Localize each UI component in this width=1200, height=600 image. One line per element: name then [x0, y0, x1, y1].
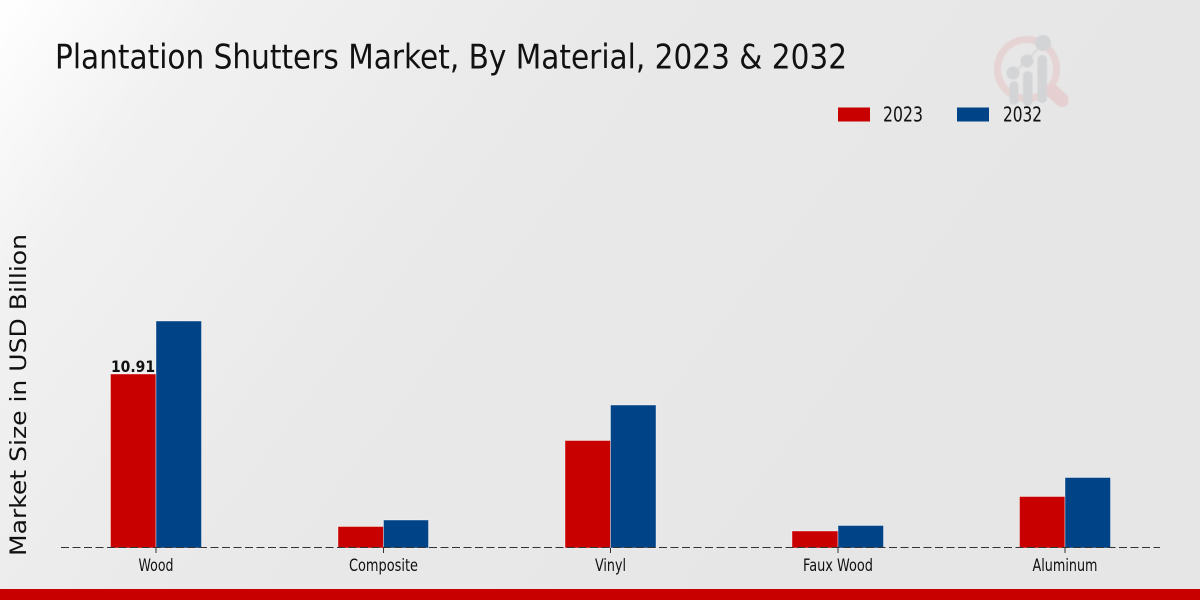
bar chart	[61, 321, 1160, 575]
bars: Vinyl	[565, 405, 656, 548]
category label: Composite: Composite	[349, 556, 418, 575]
data label: Wood 2023: 10.91	[111, 357, 155, 376]
bars: Wood	[110, 321, 202, 548]
footer bar	[0, 589, 1200, 600]
legend item: 2032	[957, 102, 1042, 126]
category label: Aluminum: Aluminum	[1032, 556, 1098, 575]
legend item: 2023: 2023	[883, 102, 923, 126]
bars: Aluminum	[1020, 478, 1110, 548]
category label: Vinyl: Vinyl	[595, 556, 626, 575]
category label: Faux Wood: Faux Wood	[803, 556, 873, 575]
legend item: 2032: 2032	[1003, 102, 1042, 126]
y-axis title: Market Size in USD Billion	[6, 234, 32, 556]
bars: Composite	[338, 520, 428, 548]
x-axis ticks	[156, 548, 1065, 553]
icon: watermark logo	[998, 35, 1062, 106]
category label: Wood: Wood	[138, 556, 174, 575]
legend item: 2023	[838, 102, 923, 126]
title: Plantation Shutters Market, By Material, 2023 & 2032	[55, 38, 847, 76]
x-axis baseline	[61, 546, 1160, 548]
legend	[838, 102, 1042, 126]
bars: Faux Wood	[792, 526, 884, 548]
